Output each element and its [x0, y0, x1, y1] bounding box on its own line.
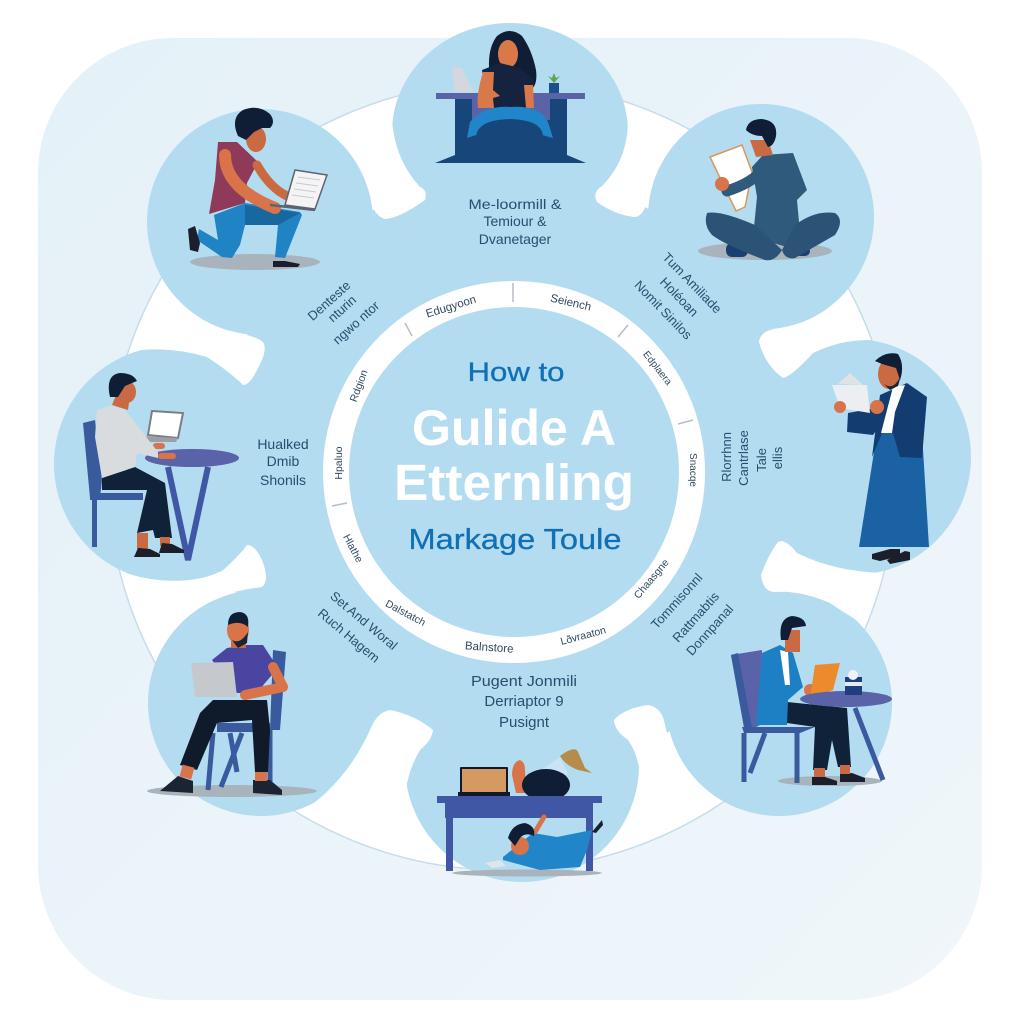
figure: people at and under desk [437, 749, 603, 876]
ring labels: Hlathe [340, 532, 365, 565]
figure: standing man reading [832, 353, 929, 564]
title [394, 357, 634, 556]
ring labels: Rdgion [348, 368, 371, 404]
white outer circle [108, 82, 896, 870]
spoke labels: Me-loormill & [468, 196, 562, 212]
figure: woman at desk [435, 31, 586, 163]
spoke labels: Set And Woral [327, 588, 401, 653]
title: How to [468, 357, 564, 387]
spoke labels: ellis [770, 446, 785, 469]
spoke labels: Derriaptor 9 [484, 693, 564, 710]
spoke labels: Dvanetager [479, 231, 552, 247]
spoke labels: Rlorrhnn [719, 432, 734, 482]
spoke labels: Tum Amiliade [660, 250, 725, 316]
title: Markage Toule [408, 524, 622, 556]
central ring [332, 283, 693, 650]
figure: cross-legged person with board [698, 119, 840, 260]
ring labels: Balnstore [465, 640, 514, 656]
title: Etternling [394, 454, 634, 511]
figure: man on laptop in chair [147, 612, 317, 797]
spoke labels: Shonils [260, 472, 306, 488]
spoke labels: Temiour & [483, 213, 547, 229]
spoke labels: Holéoan [657, 274, 701, 320]
figure: seated person at cafe table [731, 616, 892, 786]
figure: kneeling person with laptop [188, 108, 327, 270]
white notches between bubbles [130, 124, 876, 840]
spoke labels: Denteste [305, 278, 353, 324]
spoke labels: Rattmabtis [669, 589, 722, 645]
ring labels: Edugyoon [425, 294, 478, 320]
spoke labels: Cantrlase [736, 430, 751, 486]
spoke labels [257, 196, 785, 731]
ring labels: Dalstatch [383, 598, 428, 629]
spoke labels: Pusignt [499, 714, 550, 731]
ring labels: Seiench [549, 293, 592, 314]
spoke labels: Dmib [267, 453, 300, 469]
ring labels: Chaasgne [632, 557, 672, 601]
spoke labels: ngwo ntor [330, 298, 383, 347]
spoke labels: Tommisonnl [648, 570, 706, 632]
spoke labels: Ruch Hagem [315, 605, 383, 666]
spoke labels: Nomit Sinilos [631, 277, 695, 343]
spoke labels: Hualked [257, 436, 309, 452]
ring labels: Lðvraaton [559, 624, 607, 648]
ring labels: Snacqe [687, 453, 698, 487]
spoke labels: Donnpanal [683, 602, 736, 658]
figure: man at table with laptop [83, 373, 239, 560]
spoke labels: Tale [754, 448, 769, 472]
spoke labels: Pugent Jonmili [471, 673, 577, 690]
title: Gulide A [412, 400, 616, 456]
spoke labels: nturin [325, 292, 359, 325]
ring labels: Hpaluo [333, 446, 345, 480]
blue hub with eight scenario bubbles [54, 23, 971, 882]
ring labels: Edplaera [640, 349, 674, 388]
ring labels [333, 293, 698, 656]
